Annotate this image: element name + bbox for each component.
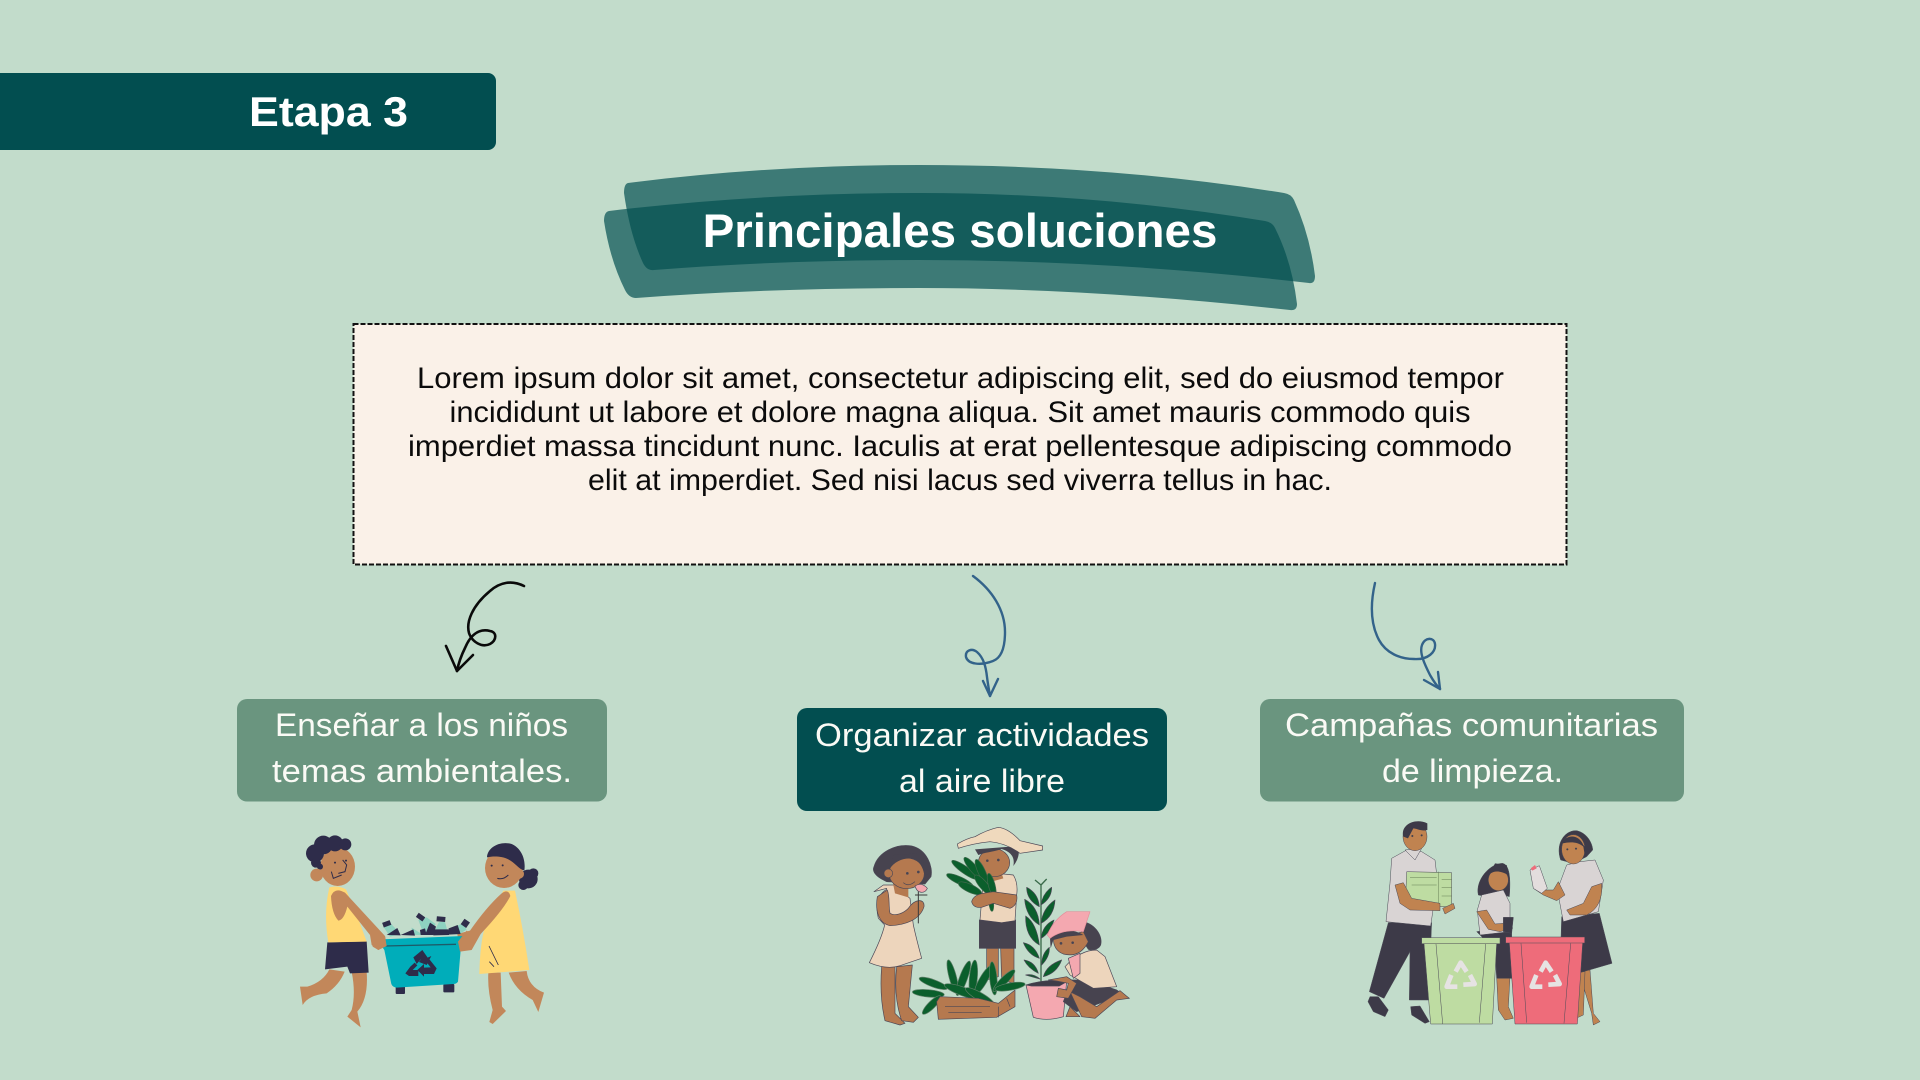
text panel: intro paragraph: incididunt ut labore et dolore magna aliqua. Sit amet mauris commodo quis [450,396,1470,429]
stage banner: Etapa 3 [0,73,496,150]
illustration: family sorting recycling [1368,821,1612,1025]
label box: Campañas comunitarias [1260,699,1684,802]
title: Principales soluciones on brush strokes: Principales soluciones [703,205,1217,258]
woman with bottle [1530,831,1612,1025]
kneeling girl with headscarf [1047,912,1129,1018]
man carrying box [1368,821,1455,1023]
arrow: centre, blue [966,576,1005,696]
label box: Organizar actividades [797,708,1167,811]
title: Principales soluciones on brush strokes [604,165,1315,310]
text panel: intro paragraph [354,324,1566,564]
arrow: right, blue [1372,583,1440,689]
illustration: two children carrying a recycling bin [300,835,544,1027]
label box: Campañas comunitarias: de limpieza. [1382,753,1563,789]
arrow: left, black [446,583,524,671]
boy with straw hat [945,827,1043,983]
label box: Enseñar a los niños [237,699,607,802]
label box: Enseñar a los niños: temas ambientales. [272,753,572,789]
label box: Organizar actividades: al aire libre [899,763,1065,799]
label box: Campañas comunitarias: Campañas comunitarias [1285,707,1658,743]
stage banner: Etapa 3: Etapa 3 [249,88,408,135]
text panel: intro paragraph: imperdiet massa tincidunt nunc. Iaculis at erat pellentesque adipiscing commodo [408,430,1512,463]
label box: Enseñar a los niños: Enseñar a los niños [275,707,568,743]
label box: Organizar actividades: Organizar actividades [815,717,1149,753]
text panel: intro paragraph: Lorem ipsum dolor sit amet, consectetur adipiscing elit, sed do eiusmod tempor [417,362,1504,395]
girl behind bins [1477,863,1513,1020]
boy [300,835,387,1027]
red bin [1506,937,1585,1024]
green bin [1422,938,1500,1024]
illustration: children gardening [869,827,1129,1025]
crate with plants [912,959,1026,1019]
potted plant [1023,879,1067,1019]
girl [457,843,544,1024]
recycling bin with bottles [372,913,473,994]
girl with flower [869,846,931,1025]
text panel: intro paragraph: elit at imperdiet. Sed nisi lacus sed viverra tellus in hac. [588,464,1332,497]
